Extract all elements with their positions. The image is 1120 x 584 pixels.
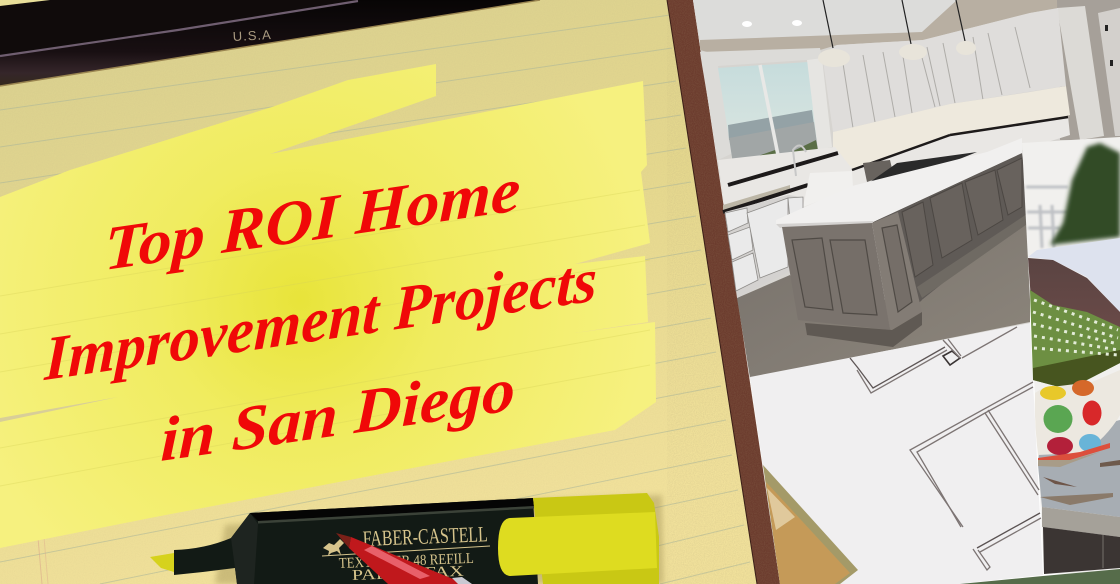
icon: yellow highlighter pen: [150, 493, 664, 584]
title: [43, 154, 598, 475]
brown dome underside: [1028, 258, 1120, 330]
panel: yellow highlighter strokes: [0, 64, 656, 548]
brand text: FABER-CASTELL: [362, 521, 488, 551]
foliage strip at bottom edge: [960, 569, 1120, 584]
upper cabinets: [822, 8, 1066, 132]
stove: [863, 152, 977, 182]
panel: kitchen photo: [693, 0, 1120, 378]
highlighter tip: [150, 553, 174, 572]
panel: brown clipboard edge: [667, 0, 780, 584]
weathered table: [1038, 420, 1120, 517]
highlighter cap: [533, 493, 659, 584]
island front face: [782, 212, 922, 347]
right door and wall: [1057, 0, 1120, 140]
backsplash: [833, 86, 1070, 170]
title line 1: Top ROI Home: [104, 154, 521, 284]
title line 2: Improvement Projects: [43, 244, 598, 394]
teapot: [1035, 370, 1120, 467]
brand text: [322, 521, 490, 584]
panel: teapot plant photo: [1022, 137, 1120, 574]
white dome: [1028, 238, 1120, 312]
back counter: [718, 116, 1070, 260]
panel: legal pad paper: [0, 0, 757, 584]
rope trim: [1042, 507, 1120, 537]
panel: floor plan blueprint: [750, 323, 1043, 584]
faucet: [793, 145, 806, 176]
blurred window grid: [1026, 187, 1068, 248]
lower cabinets: [725, 195, 803, 298]
brand text: TEXTLINER 48 REFILL: [339, 551, 474, 572]
blurred tree: [1050, 143, 1120, 245]
wall: [700, 0, 1060, 55]
wooden board: [763, 465, 858, 584]
window: [718, 58, 832, 177]
title line 3: in San Diego: [160, 354, 516, 475]
floor: [737, 210, 1030, 378]
clip stamp: U.S.A: [232, 27, 272, 44]
farmhouse sink: [803, 171, 853, 207]
pendant lamps: [818, 0, 976, 67]
island top: [776, 138, 1022, 228]
highlighter body: [174, 498, 538, 584]
brand text: PAPIER FAX: [352, 564, 464, 584]
icon: red marker pen: [336, 533, 472, 584]
island right face: [873, 153, 1030, 330]
clipboard clip at top of pad: [0, 0, 540, 86]
plant: [1030, 290, 1120, 388]
ceiling: [693, 0, 957, 40]
window header and left cabinet: [700, 48, 822, 160]
recessed lights: [742, 20, 802, 27]
stone wall: [1043, 527, 1120, 574]
